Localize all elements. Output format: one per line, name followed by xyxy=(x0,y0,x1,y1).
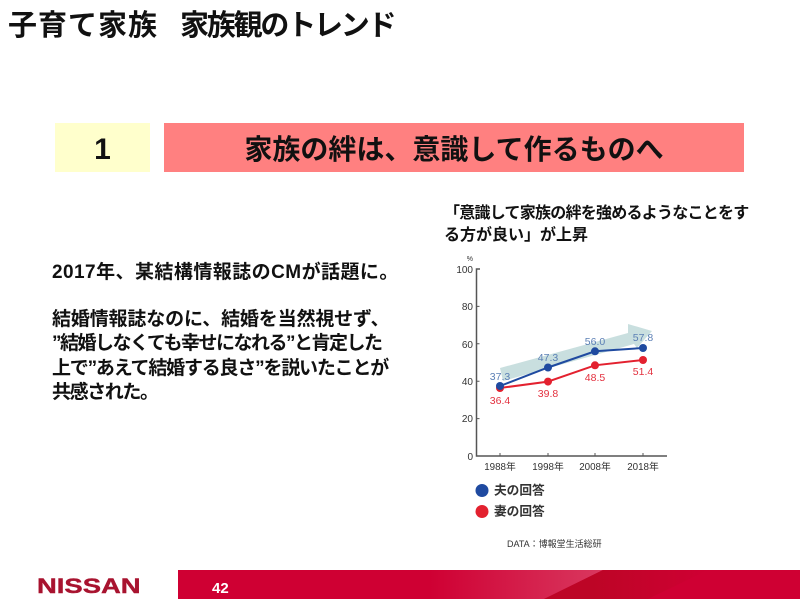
chart heading: る方が良い」が上昇 xyxy=(444,227,588,244)
legend: husband: 夫の回答 xyxy=(494,482,545,498)
wife series xyxy=(496,356,647,392)
footer logo: NISSAN xyxy=(37,574,141,598)
wife values xyxy=(490,366,653,407)
wife values: 36.4 xyxy=(490,395,510,407)
body text: 結婚情報誌なのに、結婚を当然視せず、 xyxy=(52,308,389,330)
legend: wife xyxy=(476,504,545,518)
body text xyxy=(52,308,389,403)
x axis labels: 2008年 xyxy=(579,460,611,473)
x axis labels xyxy=(484,460,659,473)
husband series xyxy=(496,344,647,390)
heading banner xyxy=(164,123,744,172)
x axis labels: 1988年 xyxy=(484,460,516,473)
y axis labels: 20 xyxy=(462,414,473,425)
number box: 1 xyxy=(94,133,111,166)
y axis labels: 80 xyxy=(462,302,473,313)
x axis labels: 2018年 xyxy=(627,460,659,473)
body text: 共感された。 xyxy=(52,382,158,403)
husband values: 37.3 xyxy=(490,371,510,383)
wife values: 51.4 xyxy=(633,366,653,378)
footer bar xyxy=(178,570,800,599)
y axis labels xyxy=(456,256,473,463)
body text: ”結婚しなくても幸せになれる”と肯定した xyxy=(52,333,381,354)
chart heading xyxy=(444,204,749,244)
husband values: 47.3 xyxy=(538,352,558,364)
title xyxy=(8,10,394,42)
y axis labels: 100 xyxy=(456,265,473,276)
legend: wife: 妻の回答 xyxy=(494,504,545,518)
title: 家族観のトレンド xyxy=(180,10,394,42)
husband values xyxy=(490,332,653,383)
footer sheen xyxy=(454,570,656,599)
heading banner: 家族の絆は、意識して作るものへ xyxy=(244,134,664,165)
line chart xyxy=(456,256,667,518)
wife values: 39.8 xyxy=(538,388,558,400)
y axis labels: % xyxy=(467,256,473,263)
wife values: 48.5 xyxy=(585,372,605,384)
chart heading: 「意識して家族の絆を強めるようなことをす xyxy=(444,205,749,222)
y axis labels: 40 xyxy=(462,377,473,388)
page number: 42 xyxy=(212,580,229,597)
trend arrow xyxy=(500,324,652,381)
x axis labels: 1998年 xyxy=(532,460,564,473)
body text: 上で”あえて結婚する良さ”を説いたことが xyxy=(52,358,388,379)
husband values: 56.0 xyxy=(585,336,605,348)
legend: husband xyxy=(476,482,545,498)
husband values: 57.8 xyxy=(633,332,653,344)
lead text: 2017年、某結構情報誌のCMが話題に。 xyxy=(52,262,399,283)
y axis labels: 0 xyxy=(467,452,473,463)
title: 子育て家族 xyxy=(8,10,158,42)
number box xyxy=(55,123,150,172)
y axis labels: 60 xyxy=(462,340,473,351)
axes xyxy=(476,269,667,456)
data source: DATA：博報堂生活総研 xyxy=(507,539,602,549)
